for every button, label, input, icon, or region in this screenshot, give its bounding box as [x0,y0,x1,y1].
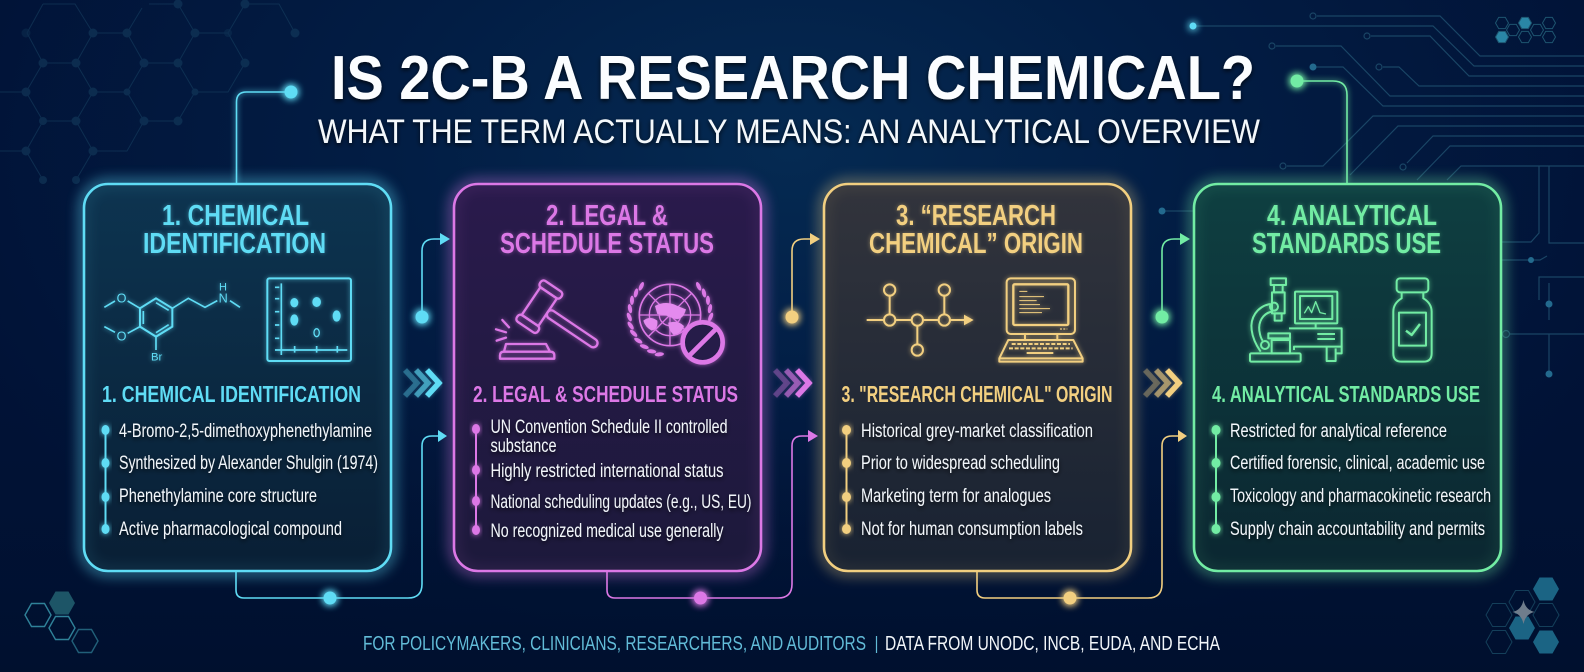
panel 2 title [500,200,714,260]
panel 3 bullet list: Historical grey-market classification [861,421,1093,442]
panel 2 title: 2. LEGAL & [546,200,668,232]
panel 4 bullet list: Supply chain accountability and permits [1230,519,1485,540]
chevrons panel 1 to 2 [405,370,439,396]
panel 2: legal and schedule status [454,184,761,571]
panel 3 title: 3. “RESEARCH [896,200,1056,232]
panel 2 bullet list [472,417,752,542]
arrow: lower connector panel 3 to 4 [977,430,1187,604]
panel 4 heading: 4. ANALYTICAL STANDARDS USE [1212,381,1480,407]
icon: TLC plate chart [267,278,351,361]
hexagons bottom right [1486,578,1559,654]
connector: title to panel 1 [236,86,298,184]
icon: vintage computer [999,278,1083,362]
panel 3 title: CHEMICAL” ORIGIN [869,228,1083,260]
panel 4 bullet list: Certified forensic, clinical, academic use [1230,453,1485,474]
panel 2 bullet list: National scheduling updates (e.g., US, EU) [490,492,752,513]
icon: molecule structure: H [219,282,227,294]
hexagons bottom left [25,592,98,652]
panel 1 bullet list: Synthesized by Alexander Shulgin (1974) [119,453,378,474]
panel 2 bullet list: No recognized medical use generally [490,521,724,542]
icon: molecule structure: Br [151,351,163,363]
circuit traces right [1158,13,1584,378]
connector: title to panel 4 [1290,74,1347,184]
panel 3 bullet list: Not for human consumption labels [861,519,1083,540]
panel 4 title: 4. ANALYTICAL [1267,200,1437,232]
title: IS 2C-B A RESEARCH CHEMICAL? [331,44,1255,113]
panel 1 heading: 1. CHEMICAL IDENTIFICATION [102,381,361,407]
panel 2 heading: 2. LEGAL & SCHEDULE STATUS [473,381,738,407]
arrow: upper connector panel 1 to 2 [416,233,450,324]
arrow: upper connector panel 2 to 3 [786,233,820,324]
panel 1 bullet list: Phenethylamine core structure [119,486,317,507]
icon: vial with checkmark [1393,278,1432,362]
panel 2 bullet list: substance [490,436,556,457]
panel 2 bullet list: UN Convention Schedule II controlled [490,417,728,438]
panel 4 title: STANDARDS USE [1252,228,1441,260]
panel 1 bullet list [102,421,378,540]
panel 1 title [143,200,326,260]
panel 1: chemical identification [84,184,391,571]
icon: molecule structure: N [219,291,228,305]
panel 4 title [1252,200,1441,260]
panel 2 title: SCHEDULE STATUS [500,228,714,260]
chevrons panel 3 to 4 [1145,370,1179,396]
panel 4: analytical standards use [1194,184,1501,571]
panel 1 title: 1. CHEMICAL [162,200,309,232]
panel 4 bullet list: Toxicology and pharmacokinetic research [1230,486,1491,507]
panel 4 bullet list: Restricted for analytical reference [1230,421,1447,442]
icon: branching timeline [867,284,974,356]
arrow: lower connector panel 2 to 3 [607,430,818,604]
icon: molecule structure: O [117,330,127,344]
arrow: upper connector panel 3 to 4 [1156,233,1190,324]
panel 1 bullet list: 4-Bromo-2,5-dimethoxyphenethylamine [119,421,372,442]
panel 1 title: IDENTIFICATION [143,228,326,260]
panel 3 bullet list: Prior to widespread scheduling [861,453,1060,474]
panel 2 bullet list: Highly restricted international status [490,461,724,482]
hexagons top right [1496,17,1555,43]
icon: molecule structure [104,282,240,363]
panel 3 title [869,200,1083,260]
panel 3 bullet list [842,421,1093,540]
footer: FOR POLICYMAKERS, CLINICIANS, RESEARCHERS, AND AUDITORS [363,633,866,655]
footer: DATA FROM UNODC, INCB, EUDA, AND ECHA [885,633,1221,655]
icon: UN emblem with prohibition sign [626,281,723,362]
panel 1 bullet list: Active pharmacological compound [119,519,342,540]
panel 4 bullet list [1212,421,1491,540]
icon: gavel [496,279,611,366]
arrow: lower connector panel 1 to 2 [236,430,447,604]
subtitle: WHAT THE TERM ACTUALLY MEANS: AN ANALYTICAL OVERVIEW [318,113,1260,151]
panel 3 heading: 3. "RESEARCH CHEMICAL" ORIGIN [842,381,1112,407]
circuit node: cyan [1190,22,1196,30]
icon: molecule structure: O [117,291,127,305]
chevrons panel 2 to 3 [775,370,809,396]
hexagon network top left [0,0,300,184]
panel 3 bullet list: Marketing term for analogues [861,486,1051,507]
panel 3: research chemical origin [824,184,1131,571]
icon: microscope and monitor [1250,278,1342,362]
